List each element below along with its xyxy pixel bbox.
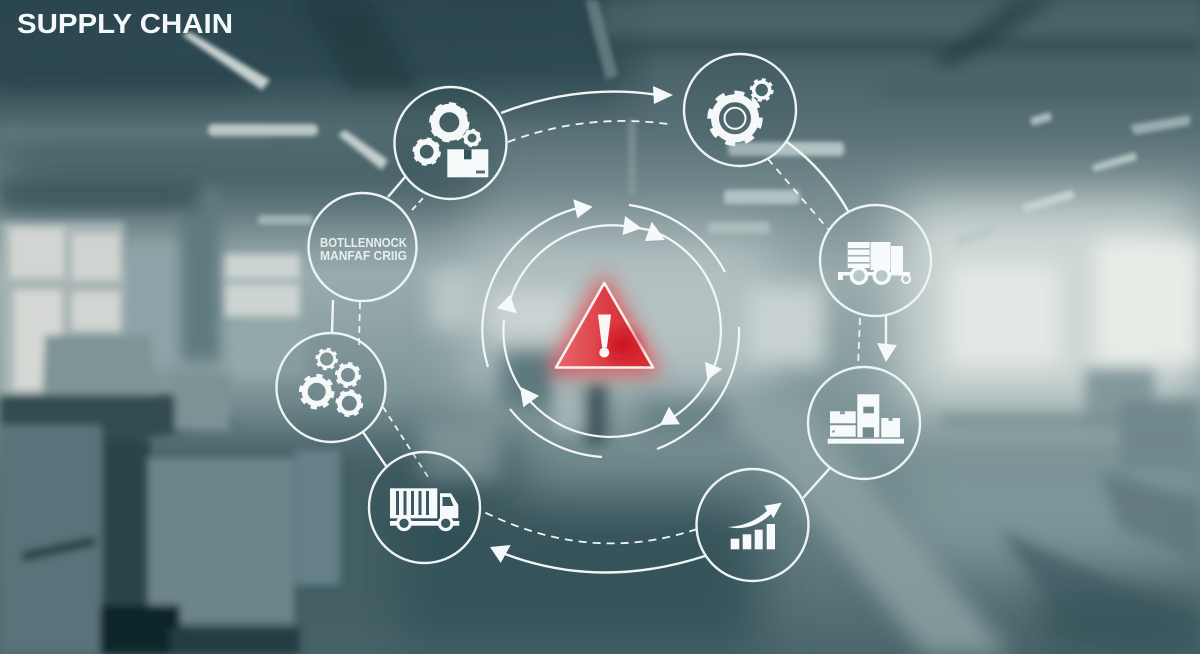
- central ring arrowheads: [497, 199, 722, 425]
- solid link: warehouse to chart: [803, 468, 830, 498]
- bottleneck text: [320, 236, 407, 263]
- solid link: bottleneck to packaging: [388, 177, 405, 197]
- node: packaging and gears: [394, 87, 506, 199]
- node: bottleneck label: [308, 193, 416, 301]
- title: SUPPLY CHAIN: [17, 8, 233, 39]
- solid link: gears to bottleneck: [332, 300, 333, 333]
- solid link: truck to gears: [363, 432, 386, 466]
- solid arrow: packaging to manufacturing: [501, 92, 658, 113]
- dashed link: bottleneck to packaging: [412, 197, 424, 210]
- dashed link: manufacturing to transport: [768, 159, 828, 229]
- outer ring arcs: [482, 205, 739, 457]
- connector arrowheads: [490, 86, 897, 563]
- dashed link: truck to gears: [383, 407, 430, 480]
- bottleneck text: MANFAF CRIIG: [320, 249, 407, 263]
- solid link: manufacturing to transport: [787, 142, 848, 211]
- node: manufacturing gears: [684, 54, 796, 166]
- warning icon with red glow: [546, 272, 662, 374]
- solid arrow: chart to truck: [505, 554, 705, 573]
- inner ring: [503, 225, 721, 437]
- dashed link: chart to truck: [482, 511, 697, 543]
- bottleneck text: BOTLLENNOCK: [320, 236, 407, 250]
- node: delivery truck: [369, 452, 480, 563]
- node: gear cluster: [276, 333, 386, 442]
- node: growth chart: [696, 469, 808, 581]
- process cycle connectors: [332, 92, 886, 573]
- dashed link: packaging to manufacturing: [508, 121, 668, 142]
- node: warehouse: [808, 367, 920, 479]
- dashed link: gears to bottleneck: [359, 302, 360, 345]
- solid arrow: transport to warehouse: [885, 316, 887, 346]
- dashed link: transport to warehouse: [858, 318, 860, 367]
- node: transport vehicle: [820, 205, 931, 316]
- central circular arrows: [482, 205, 739, 457]
